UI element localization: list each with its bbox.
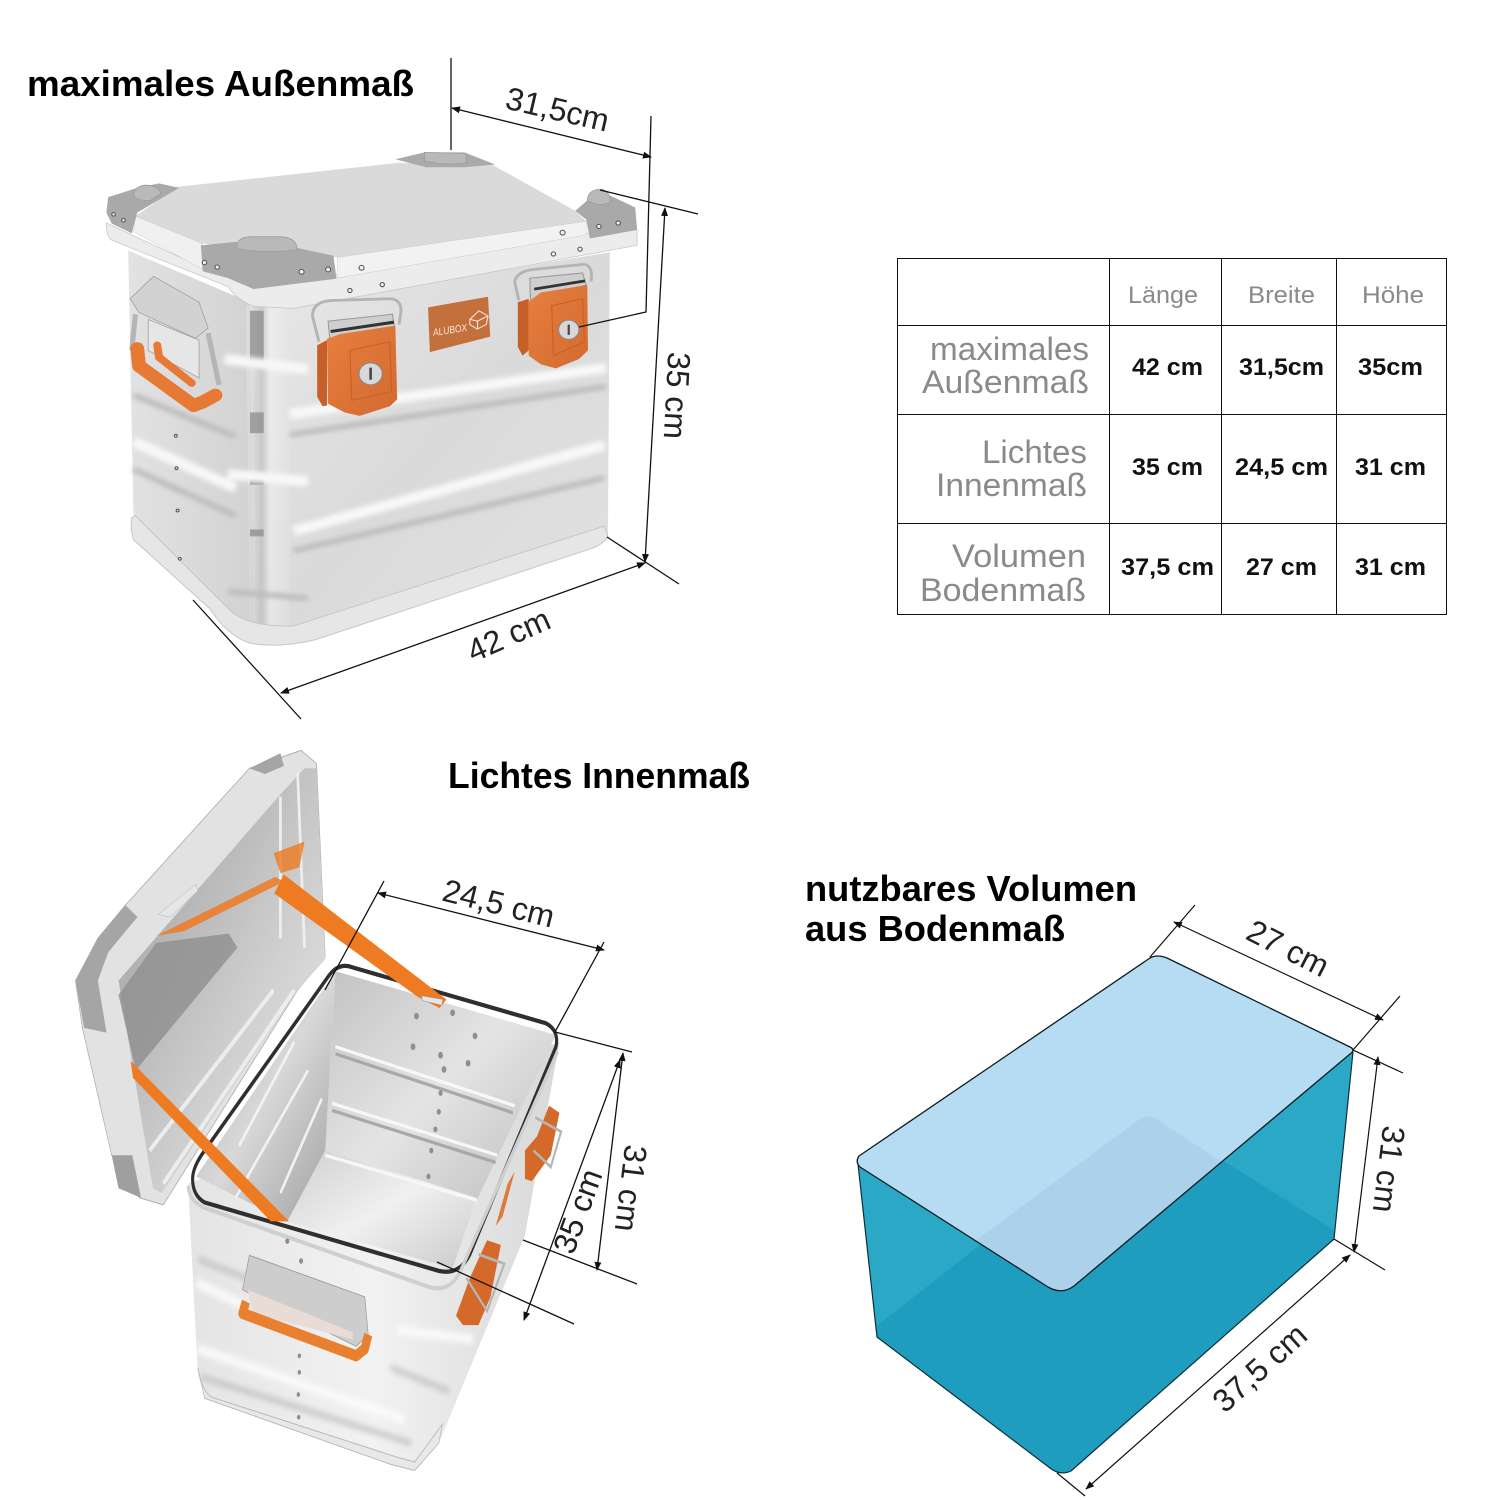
label 31 cm cuboid: 31 cm	[1366, 1124, 1412, 1215]
front faces	[858, 1052, 1353, 1473]
inner floor through top	[975, 1116, 1222, 1291]
nameplate ALUBOX	[428, 297, 490, 352]
table values: 31 cm	[1355, 454, 1426, 481]
table values: 37,5 cm	[1121, 554, 1214, 581]
column headers	[1128, 282, 1424, 309]
table values: 35cm	[1358, 354, 1423, 381]
corner fitting right	[575, 190, 637, 238]
table values: 31 cm	[1355, 554, 1426, 581]
strap clip	[422, 996, 443, 1005]
dimension lines top box	[193, 58, 698, 719]
corner fitting back	[395, 152, 495, 167]
latch right lower	[456, 1240, 504, 1325]
table values: 24,5 cm	[1235, 454, 1328, 481]
body front ribs	[196, 1259, 473, 1443]
label 37,5 cm: 37,5 cm	[1205, 1316, 1314, 1419]
row labels: maximales	[930, 331, 1089, 367]
interior floor	[287, 1151, 477, 1269]
box left side	[128, 251, 254, 640]
bottom rim	[198, 1368, 442, 1471]
label 35 cm: 35 cm	[657, 351, 697, 440]
lid band left	[134, 216, 203, 269]
latch right upper	[525, 1106, 561, 1181]
box vertical corner	[246, 306, 290, 636]
top outline	[857, 956, 1353, 1291]
blue volume cuboid	[857, 956, 1353, 1473]
table values: 35 cm	[1132, 454, 1203, 481]
box rim	[188, 1051, 558, 1288]
nameplate ALUBOX: ALUBOX	[431, 322, 469, 339]
lid band front	[337, 221, 586, 278]
bottom rim	[131, 516, 608, 645]
row labels	[920, 331, 1089, 608]
table	[898, 258, 1446, 614]
corrugated ribs	[134, 359, 606, 598]
table values: 31,5cm	[1239, 354, 1324, 381]
corner fitting front	[201, 242, 336, 289]
front outline	[858, 1052, 1353, 1473]
interior left wall	[196, 971, 336, 1221]
table values: 27 cm	[1246, 554, 1317, 581]
open lid	[75, 750, 325, 1205]
row labels: Bodenmaß	[920, 572, 1086, 608]
top face	[857, 956, 1353, 1291]
inner floor shade	[877, 1116, 1334, 1473]
row labels: Innenmaß	[936, 467, 1087, 503]
table values: 42 cm	[1132, 354, 1203, 381]
label 31 cm open box: 31 cm	[608, 1143, 654, 1234]
row labels: Außenmaß	[922, 364, 1089, 400]
lid top plate	[135, 163, 586, 257]
dimension lines cuboid	[1057, 905, 1403, 1496]
front handle	[243, 1255, 368, 1356]
closed aluminium box photo	[106, 152, 637, 645]
orange hint	[496, 1172, 515, 1226]
row labels: Volumen	[952, 538, 1086, 574]
straps	[131, 841, 446, 1221]
table values	[1121, 354, 1426, 581]
heading: Lichtes Innenmaß: Lichtes Innenmaß	[448, 755, 750, 796]
gasket	[193, 966, 557, 1272]
interior far wall	[325, 971, 556, 1200]
label 24,5 cm: 24,5 cm	[439, 872, 558, 935]
heading: nutzbares Volumen aus Bodenmaß: aus Bodenmaß	[805, 908, 1065, 949]
rivets	[112, 213, 620, 560]
column headers: Breite	[1248, 282, 1315, 309]
rivets	[285, 1009, 477, 1420]
label 27 cm: 27 cm	[1241, 912, 1335, 984]
side handle	[130, 276, 219, 406]
label 42 cm: 42 cm	[461, 601, 556, 669]
row labels: Lichtes	[982, 434, 1087, 470]
dimension lines open box	[325, 881, 637, 1324]
corner dark segments	[250, 311, 264, 536]
corner fitting left	[106, 183, 179, 233]
open aluminium box photo	[75, 750, 561, 1471]
label 35 cm open box: 35 cm	[546, 1164, 609, 1258]
latch right	[515, 264, 591, 368]
box body	[188, 1042, 559, 1469]
column headers: Länge	[1128, 282, 1198, 309]
heading: maximales Außenmaß: maximales Außenmaß	[27, 63, 414, 104]
column headers: Höhe	[1362, 282, 1424, 309]
heading: nutzbares Volumen aus Bodenmaß: nutzbares Volumen	[805, 868, 1137, 909]
interior ribs	[236, 1042, 515, 1200]
corner caps	[134, 152, 610, 252]
lid rim	[106, 223, 637, 308]
box front side	[250, 252, 610, 643]
latch left	[312, 299, 401, 416]
heading: nutzbares Volumen aus Bodenmaß	[805, 868, 1137, 949]
label 31,5cm: 31,5cm	[502, 80, 613, 139]
